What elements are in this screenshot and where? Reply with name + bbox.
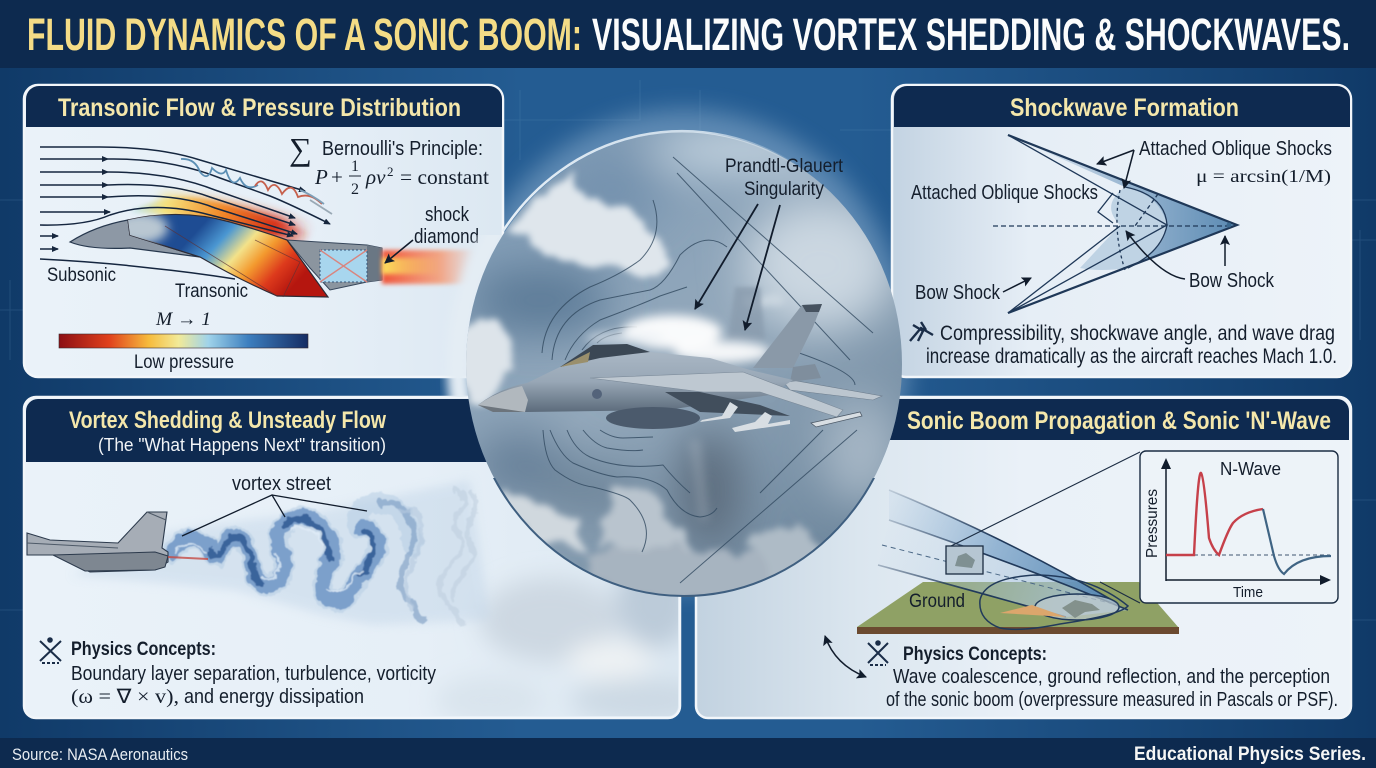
vortex street label xyxy=(182,473,367,536)
x axis label: Time xyxy=(1233,584,1263,601)
curved double arrow xyxy=(825,636,866,677)
shock diamond label: shock xyxy=(425,204,470,226)
attached oblique shocks left label: Attached Oblique Shocks xyxy=(911,182,1098,204)
ground plane xyxy=(857,582,1179,634)
panel: shockwave formation xyxy=(892,85,1351,377)
Bernoulli formula: + xyxy=(331,165,343,189)
attached oblique shocks top label xyxy=(1097,138,1332,188)
singularity label xyxy=(695,156,844,330)
shock diamond label xyxy=(385,204,479,263)
halo behind central circle xyxy=(459,110,909,590)
singularity label: Singularity xyxy=(744,179,824,200)
source: Source: NASA Aeronautics xyxy=(12,745,188,764)
footer bar xyxy=(0,738,1376,768)
central image: aircraft in vapor cone xyxy=(457,128,910,600)
cone streak xyxy=(690,440,708,520)
panel: sonic boom propagation xyxy=(696,397,1351,718)
shock cone diagram xyxy=(993,135,1237,313)
panel content: sonic boom xyxy=(825,407,1338,711)
y axis label: Pressures xyxy=(1144,489,1161,558)
circle rim lower xyxy=(493,478,875,597)
physics concepts heading: Physics Concepts: xyxy=(903,644,1047,665)
ground label: Ground xyxy=(909,591,965,612)
vortex street xyxy=(172,490,475,625)
low pressure label: Low pressure xyxy=(134,352,234,373)
sigma symbol: ∑ xyxy=(289,131,312,167)
aircraft xyxy=(478,304,882,432)
Mach angle formula: μ = arcsin(1/M) xyxy=(1196,166,1331,187)
Mach label: M → 1 xyxy=(155,309,211,330)
title bar xyxy=(0,0,1376,68)
shock diamond label: diamond xyxy=(414,226,479,248)
pressure contour lines xyxy=(542,157,873,583)
Bernoulli formula: P xyxy=(314,165,328,189)
aircraft tail xyxy=(27,512,208,572)
sky tones xyxy=(470,128,900,550)
singularity label: Prandtl-Glauert xyxy=(725,156,844,177)
physics concepts text: and energy dissipation xyxy=(184,686,364,708)
subheading: (The "What Happens Next" transition) xyxy=(98,435,386,455)
Bernoulli formula: = constant xyxy=(400,165,489,189)
aircraft body in cross-section xyxy=(70,220,200,257)
physics concepts heading: Physics Concepts: xyxy=(71,639,216,660)
wake envelope xyxy=(72,480,490,625)
heading: Shockwave Formation xyxy=(1010,94,1239,122)
fluffy clouds xyxy=(457,172,825,600)
physics concepts text xyxy=(71,663,436,708)
vapor cloud xyxy=(585,315,770,363)
physics concepts text xyxy=(886,666,1338,711)
panel: transonic flow xyxy=(24,85,503,377)
subsonic label: Subsonic xyxy=(47,265,116,286)
physics concepts text: (ω = ∇ × v), xyxy=(71,686,179,708)
turbulent wavy lines xyxy=(181,159,332,214)
Bernoulli formula: 2 xyxy=(387,164,394,179)
icon: physics cross xyxy=(40,638,61,663)
bow shock right label: Bow Shock xyxy=(1189,270,1275,292)
vapor shock silhouette xyxy=(731,286,764,338)
pale rim over panel edge xyxy=(440,235,502,397)
Bernoulli formula xyxy=(314,158,489,198)
pale arc at the top of the circle xyxy=(503,131,800,231)
heading: Transonic Flow & Pressure Distribution xyxy=(58,94,461,122)
shock diamond box xyxy=(320,250,367,282)
streamlines and pressure colours xyxy=(40,147,478,297)
arrows to vapor xyxy=(695,204,758,309)
bow shock left label: Bow Shock xyxy=(915,282,1001,304)
title: yellow part: FLUID DYNAMICS OF A SONIC BOOM: xyxy=(27,9,582,60)
vortex street label: vortex street xyxy=(232,473,331,495)
heading: Vortex Shedding & Unsteady Flow xyxy=(69,407,386,434)
physics concepts text: Boundary layer separation, turbulence, vorticity xyxy=(71,663,436,685)
icon: physics cross xyxy=(868,641,888,665)
Bernoulli text: Bernoulli's Principle: xyxy=(322,138,483,160)
Bernoulli formula: 1 xyxy=(351,158,359,175)
shock cone xyxy=(878,452,1140,629)
N-wave chart xyxy=(1140,451,1338,603)
Bernoulli formula: ρv xyxy=(365,165,386,189)
clouds at the lower right of the panel xyxy=(448,576,678,716)
chart title: N-Wave xyxy=(1220,459,1281,479)
transonic label: Transonic xyxy=(175,281,248,302)
bow shock right label xyxy=(1126,231,1275,292)
attached oblique shocks top label: Attached Oblique Shocks xyxy=(1139,138,1332,160)
Bernoulli formula: 2 xyxy=(351,181,359,198)
panel: vortex shedding xyxy=(24,397,710,724)
exhaust flame xyxy=(382,250,478,284)
icon: shock figure xyxy=(910,322,933,341)
pressure colour bar xyxy=(59,334,308,348)
compressibility note xyxy=(926,322,1337,368)
